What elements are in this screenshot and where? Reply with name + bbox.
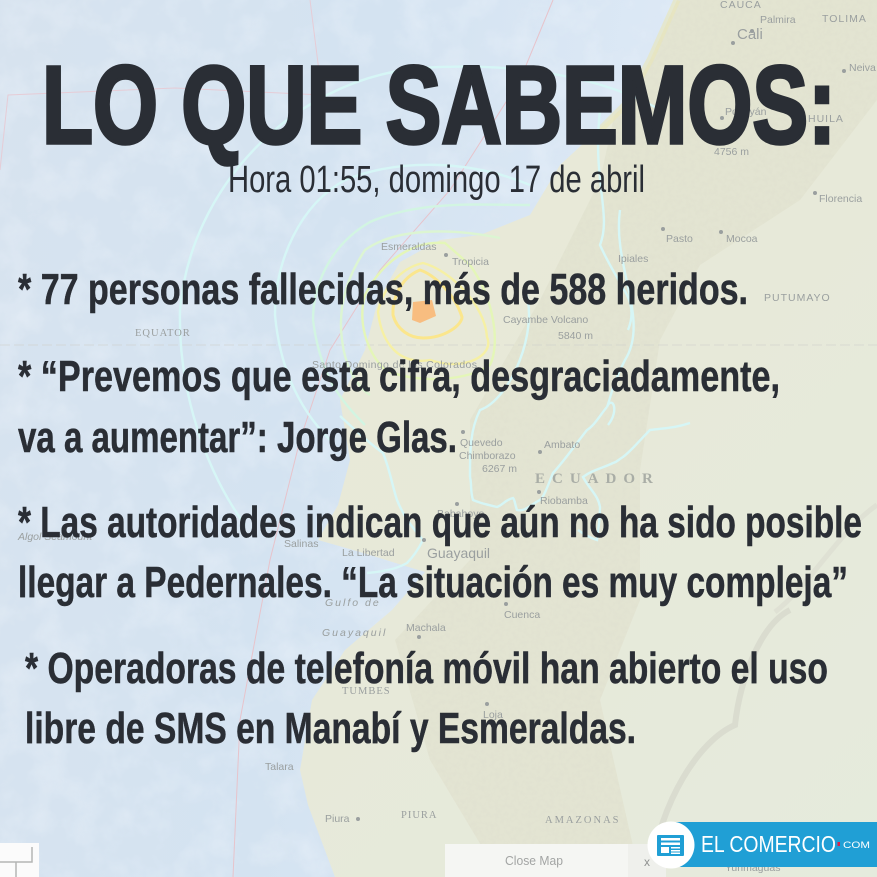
map place labels: La Libertad <box>342 547 395 559</box>
map scale box <box>0 843 39 877</box>
subtitle: date and time: Hora 01:55, domingo 17 de abril <box>228 159 645 201</box>
map place labels: Ipiales <box>618 253 648 265</box>
map place labels: Ambato <box>544 439 580 451</box>
map place labels: Chimborazo <box>459 450 516 462</box>
map place labels: Guayaquil <box>427 545 490 561</box>
map place labels: 6267 m <box>482 463 517 475</box>
text block: free SMS <box>25 644 828 753</box>
text block: Pedernales <box>18 498 862 607</box>
map place labels: Tropicia <box>452 256 489 268</box>
icon: newspaper <box>657 835 684 856</box>
map place labels: Cayambe Volcano <box>503 314 588 326</box>
map place labels: Algol Seamount <box>17 531 93 543</box>
map place labels: ECUADOR <box>535 471 660 487</box>
map place labels: Babahoyo <box>437 508 484 520</box>
text block: free SMS: libre de SMS en Manabí y Esmeraldas. <box>25 704 636 753</box>
map place labels: Loja <box>483 709 503 721</box>
map place labels: Salinas <box>284 538 318 550</box>
text block: Jorge Glas quote: va a aumentar”: Jorge Glas. <box>18 413 457 462</box>
shakemap contours <box>180 67 690 573</box>
map place labels: 5840 m <box>558 330 593 342</box>
map place labels: Guayaquil <box>322 627 387 639</box>
map place labels: TOLIMA <box>822 13 867 25</box>
map place labels: EQUATOR <box>135 328 191 339</box>
text block: Jorge Glas quote <box>18 352 780 462</box>
map place labels: PIURA <box>401 810 438 821</box>
map place labels: Yurimaguas <box>725 862 780 874</box>
map place labels: Neiva <box>849 62 876 74</box>
map place labels: TUMBES <box>342 686 391 697</box>
map place labels: Riobamba <box>540 495 588 507</box>
map place labels: Piura <box>325 813 350 825</box>
map place labels: Esmeraldas <box>381 241 436 253</box>
map place labels: Gulfo de <box>325 597 381 609</box>
map place labels: Santo Domingo de los Colorados <box>312 359 477 371</box>
logo: El Comercio <box>648 822 877 868</box>
map place labels: Popayán <box>725 106 767 118</box>
close map bar <box>445 844 666 877</box>
map place labels: Talara <box>265 761 294 773</box>
close map bar: x <box>644 855 650 869</box>
close map bar: Close Map <box>505 853 563 868</box>
map place labels: PUTUMAYO <box>764 292 831 304</box>
map place labels: HUILA <box>808 113 844 125</box>
map place labels: Machala <box>406 622 446 634</box>
map place labels: 4756 m <box>714 146 749 158</box>
map place labels: Florencia <box>819 193 862 205</box>
logo: El Comercio: COM <box>843 840 870 851</box>
map place labels: Mocoa <box>726 233 758 245</box>
map place labels: Cali <box>737 26 763 43</box>
map place labels: Palmira <box>760 14 796 26</box>
map place labels: Quevedo <box>460 437 503 449</box>
logo: El Comercio: EL COMERCIO <box>701 831 836 857</box>
map place labels: Cuenca <box>504 609 540 621</box>
map place labels: AMAZONAS <box>545 815 621 826</box>
map place labels: Pasto <box>666 233 693 245</box>
